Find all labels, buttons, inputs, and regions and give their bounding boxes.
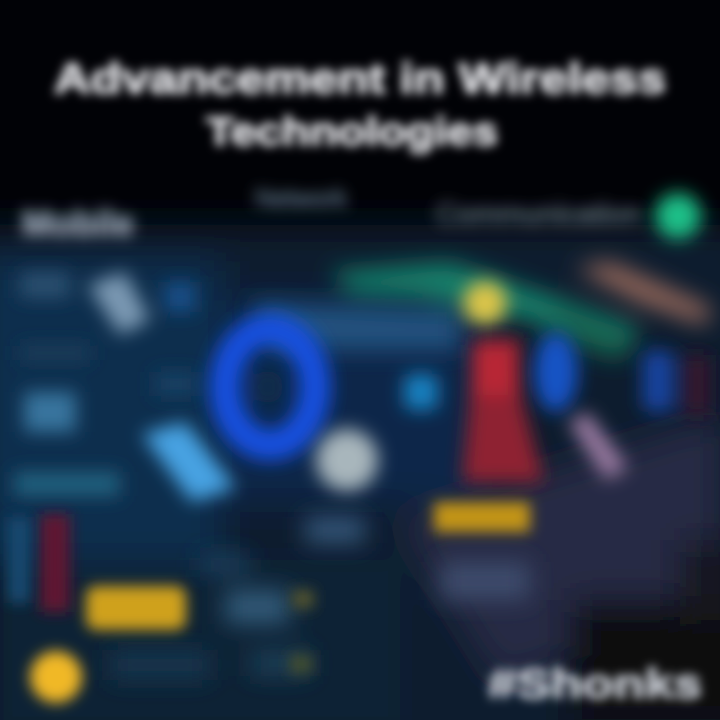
background: dark tech panel xyxy=(0,225,720,720)
title xyxy=(54,55,666,154)
strip: lower left label xyxy=(14,472,120,496)
bar: left blue vertical xyxy=(8,517,30,603)
icon: pale blue tile xyxy=(88,272,150,335)
icon: grey circle xyxy=(316,429,378,491)
icon: left blue square xyxy=(24,392,76,432)
label: top left: Mobile xyxy=(22,203,134,244)
header labels xyxy=(22,183,641,244)
bar: dark red vertical xyxy=(40,514,70,612)
shape: pink slanted tile xyxy=(568,412,628,480)
lower middle blocks xyxy=(110,517,530,680)
text block: left rows xyxy=(20,272,70,298)
label: yellow plate under tower xyxy=(434,502,530,532)
label: top right: Communication xyxy=(436,198,641,231)
small olive marks xyxy=(290,590,314,673)
icon: light blue tablet xyxy=(142,422,236,502)
title: Technologies xyxy=(206,110,498,154)
watermark wordmark: #Shonks xyxy=(488,660,702,707)
bars: blue pillars right xyxy=(534,332,710,415)
icon: green status circle xyxy=(655,193,701,239)
icon: small blue tile xyxy=(164,282,196,312)
icon: yellow coin xyxy=(30,651,82,703)
icon: blue ring xyxy=(225,329,315,445)
label: yellow plate lower left xyxy=(86,586,186,630)
label: top centre: Network xyxy=(255,183,348,213)
icon: teal square xyxy=(404,374,438,410)
title: Advancement in Wireless xyxy=(54,55,666,103)
figure: red tower xyxy=(462,338,544,482)
left icons cluster xyxy=(14,272,197,496)
band: green and salmon diagonal strip xyxy=(250,262,712,360)
icon: yellow dot xyxy=(463,281,507,325)
